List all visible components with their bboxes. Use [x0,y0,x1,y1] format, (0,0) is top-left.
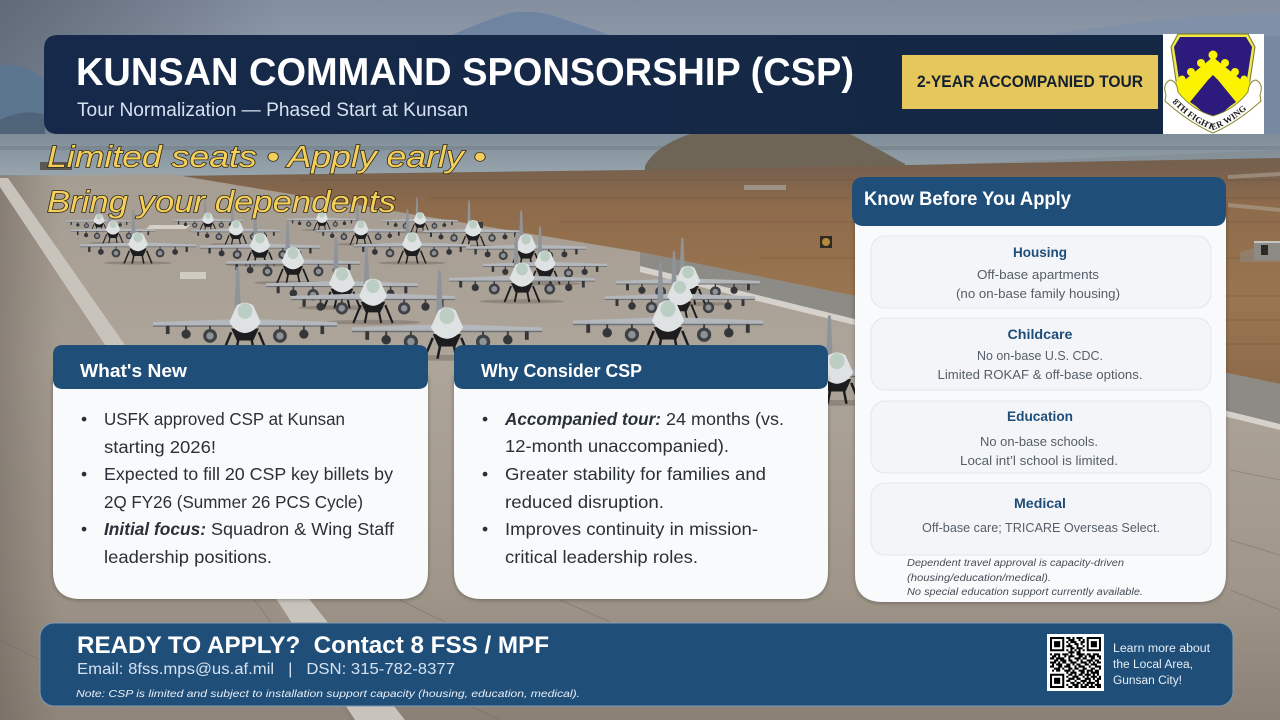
QR caption [1113,643,1211,687]
bullet list: why consider CSP: Greater stability for families and [505,464,766,484]
bullet list: why consider CSP: critical leadership roles. [505,547,698,567]
card: childcare: Limited ROKAF & off-base options. [938,367,1142,382]
card: housing: Housing [1013,244,1067,260]
title: KUNSAN COMMAND SPONSORSHIP (CSP) [76,51,854,94]
footer: ready to apply [40,623,1233,706]
bullet list: what's new: leadership positions. [104,547,272,567]
bullet list: what's new: Expected to fill 20 CSP key billets by [104,464,393,484]
card: medical: Off-base care; TRICARE Overseas Select. [922,520,1160,535]
bullet list: why consider CSP: • [482,409,488,429]
panel header: why consider CSP [454,345,828,389]
panel: why consider CSP [454,345,828,599]
bullet list: why consider CSP [482,409,784,567]
subtitle: Tour Normalization — Phased Start at Kunsan [77,100,468,121]
tagline: Limited seats • Apply early • [47,139,486,174]
tagline: Bring your dependents [47,184,396,219]
QR caption: Learn more about [1113,643,1211,655]
card: education: Local int’l school is limited. [960,453,1118,468]
bullet list: why consider CSP: • [482,519,488,539]
bullet list: what's new: • [81,519,87,539]
card: medical: Medical [1014,495,1066,511]
panel header: what's new [53,345,428,389]
icon: QR code [1047,634,1104,691]
eligibility note: (housing/education/medical). [907,573,1051,584]
bullet list: why consider CSP: • [482,464,488,484]
eligibility note: Dependent travel approval is capacity-driven [907,558,1124,569]
card: housing: Off-base apartments [977,267,1100,282]
panel header: know before you apply: Know Before You Apply [864,189,1071,210]
card: education [871,401,1211,473]
eligibility note: No special education support currently available. [907,587,1143,598]
bullet list: why consider CSP: reduced disruption. [505,492,664,512]
bullet list: what's new: starting 2026! [104,437,216,457]
card: education: Education [1007,408,1073,424]
bullet list: what's new [81,409,394,567]
footer note: Note: CSP is limited and subject to installation support capacity (housing, education, medical). [76,688,580,700]
eligibility note [907,558,1143,598]
panel: what's new [53,345,428,599]
call to action heading: READY TO APPLY? Contact 8 FSS / MPF [77,632,549,659]
card: education: No on-base schools. [980,434,1098,449]
bullet list: what's new: • [81,464,87,484]
card: housing: (no on-base family housing) [956,286,1120,301]
bullet list: why consider CSP: 12-month unaccompanied). [505,436,729,456]
badge: 2-year accompanied tour: 2-YEAR ACCOMPANIED TOUR [917,72,1143,91]
panel header: what's new: What's New [80,361,188,381]
logo: 8th Fighter Wing shield: 8TH FIGHTER WING [1172,99,1246,130]
QR caption: Gunsan City! [1113,675,1182,687]
bullet list: why consider CSP: Accompanied tour: [504,409,661,429]
bullet list: what's new: USFK approved CSP at Kunsan [104,409,345,429]
header banner [44,35,1163,134]
panel header: know before you apply [852,177,1226,226]
bullet list: why consider CSP: 24 months (vs. [666,409,784,429]
bullet list: what's new: • [81,409,87,429]
card: medical [871,483,1211,555]
badge: 2-year accompanied tour [902,55,1158,109]
QR caption: the Local Area, [1113,659,1193,671]
bullet list: what's new: Squadron & Wing Staff [211,519,394,539]
card: housing [871,236,1211,308]
card: childcare: Childcare [1008,326,1073,342]
bullet list: what's new: Initial focus: [104,519,206,539]
bullet list: why consider CSP: Improves continuity in mission- [505,519,758,539]
bullet list: what's new: 2Q FY26 (Summer 26 PCS Cycle) [104,492,363,512]
contact details: Email: 8fss.mps@us.af.mil | DSN: 315-782-8377 [77,661,455,678]
card: childcare: No on-base U.S. CDC. [977,348,1103,363]
panel header: why consider CSP: Why Consider CSP [481,361,642,381]
tagline [47,139,486,219]
panel: know before you apply [852,177,1226,602]
logo: 8th Fighter Wing shield [1163,34,1264,134]
card: childcare [871,318,1211,390]
